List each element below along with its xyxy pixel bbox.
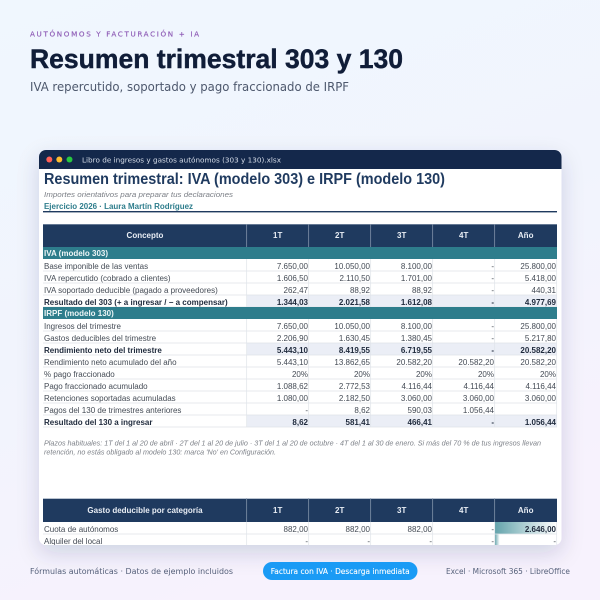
row: resultado 303: -	[491, 298, 494, 307]
row: pagos anteriores: 590,03	[408, 406, 433, 415]
row: rendimiento neto	[44, 347, 556, 354]
row: IVA soportado	[44, 287, 556, 294]
row: ingresos: 7.650,00	[277, 322, 309, 331]
row: base imponible: -	[491, 262, 494, 271]
row: pago acumulado: 2.772,53	[339, 382, 371, 391]
row: rendimiento acumulado: 20.582,20	[458, 358, 495, 367]
row: alquiler: -	[429, 537, 432, 546]
row: IVA repercutido: 2.110,50	[339, 274, 371, 283]
note: Plazos habituales: 1T del 1 al 20 de abril · 2T del 1 al 20 de julio · 3T del 1 al 20 de octubre · 4T del 1 al 30 de enero. Si más del 70 % de tus ingresos llevan	[44, 438, 541, 448]
section: IRPF: IRPF (modelo 130)	[44, 309, 114, 318]
row: base imponible	[44, 263, 556, 270]
row: IVA soportado: IVA soportado deducible (pagado a proveedores)	[44, 286, 218, 295]
row: ingresos: 10.050,00	[334, 322, 371, 331]
table header: Año	[518, 506, 534, 515]
row: pagos anteriores	[44, 407, 494, 414]
row: cuota: 882,00	[346, 525, 371, 534]
table header: 1T	[273, 231, 282, 240]
note	[44, 440, 541, 456]
row: resultado 130: 8,62	[292, 418, 309, 427]
row: gastos	[44, 335, 556, 342]
row: pago acumulado: 1.088,62	[277, 382, 309, 391]
row: ingresos: Ingresos del trimestre	[44, 322, 121, 331]
footer right text: Excel · Microsoft 365 · LibreOffice	[446, 567, 570, 576]
window title bar	[39, 150, 562, 169]
row: base imponible: 8.100,00	[401, 262, 433, 271]
row: porcentaje: 20%	[292, 370, 308, 379]
row: base imponible: 10.050,00	[334, 262, 371, 271]
footer left text: Fórmulas automáticas · Datos de ejemplo incluidos	[30, 567, 233, 576]
window title bar: Libro de ingresos y gastos autónomos (303 y 130).xlsx	[82, 155, 282, 164]
row: ingresos: 25.800,00	[520, 322, 557, 331]
row: ingresos: 8.100,00	[401, 322, 433, 331]
row: pago acumulado: Pago fraccionado acumulado	[44, 382, 148, 391]
note: retención, no estás obligado al modelo 130: marca 'No' en Configuración.	[44, 448, 276, 456]
sheet heading: Resumen trimestral: IVA (modelo 303) e IRPF (modelo 130)	[44, 171, 445, 188]
row: gastos: 5.217,80	[525, 334, 557, 343]
row: pagos anteriores: 1.056,44	[463, 406, 495, 415]
row: pagos anteriores: Pagos del 130 de trimestres anteriores	[44, 406, 181, 415]
row: cuota	[44, 526, 556, 534]
row: alquiler: -	[491, 537, 494, 546]
table header: 1T	[273, 506, 282, 515]
row: pago acumulado	[44, 383, 556, 390]
section: IVA: IVA (modelo 303)	[44, 249, 108, 258]
row: ingresos	[44, 323, 556, 330]
row: resultado 303: 1.344,03	[277, 298, 309, 307]
row: porcentaje: 20%	[478, 370, 494, 379]
shaded total cells	[247, 295, 557, 307]
row: IVA soportado: 88,92	[350, 286, 371, 295]
row: resultado 303: 1.612,08	[401, 298, 433, 307]
row: alquiler: -	[367, 537, 370, 546]
row: resultado 303: 2.021,58	[339, 298, 371, 307]
sheet heading: Ejercicio 2026 · Laura Martín Rodríguez	[44, 202, 193, 211]
row: alquiler: -	[305, 537, 308, 546]
header	[30, 30, 403, 94]
row: cuota: Cuota de autónomos	[44, 525, 118, 534]
table header: Gasto deducible por categoría	[87, 506, 203, 515]
row: rendimiento neto: 8.419,55	[339, 346, 371, 355]
panel: spreadsheet window	[39, 150, 562, 546]
row: cuota: 882,00	[284, 525, 309, 534]
row: rendimiento acumulado: Rendimiento neto acumulado del año	[44, 358, 177, 367]
row: IVA soportado: 88,92	[412, 286, 433, 295]
table header: Concepto	[127, 231, 164, 240]
row: pagos anteriores: 8,62	[354, 406, 371, 415]
row: cuota: 2.646,00	[525, 525, 557, 534]
row: gastos: -	[491, 334, 494, 343]
row: pago acumulado: 4.116,44	[401, 382, 433, 391]
sheet heading	[43, 171, 557, 212]
row: gastos: 2.206,90	[277, 334, 309, 343]
row: pagos anteriores: -	[305, 406, 308, 415]
table header: 3T	[397, 506, 406, 515]
row: IVA repercutido	[44, 275, 556, 282]
row: porcentaje: 20%	[416, 370, 432, 379]
row: base imponible: 7.650,00	[277, 262, 309, 271]
row: porcentaje: 20%	[540, 370, 556, 379]
row: base imponible: 25.800,00	[520, 262, 557, 271]
row: base imponible: Base imponible de las ventas	[44, 262, 148, 271]
row: rendimiento acumulado	[44, 359, 556, 366]
row: cuota: 882,00	[408, 525, 433, 534]
row: porcentaje	[44, 371, 556, 378]
row: rendimiento neto: 6.719,55	[401, 346, 433, 355]
row: IVA repercutido: 1.701,00	[401, 274, 433, 283]
row: rendimiento neto: -	[491, 346, 494, 355]
row: gastos: Gastos deducibles del trimestre	[44, 334, 157, 343]
row: resultado 130: 1.056,44	[525, 418, 557, 427]
row: retenciones	[44, 395, 556, 402]
row: pago acumulado: 4.116,44	[525, 382, 557, 391]
row: IVA repercutido: IVA repercutido (cobrado a clientes)	[44, 274, 171, 283]
row: IVA repercutido: 1.606,50	[277, 274, 309, 283]
row: resultado 130: 581,41	[346, 418, 371, 427]
data bars	[495, 522, 557, 534]
section: IVA	[43, 247, 557, 259]
grid	[43, 259, 557, 427]
row: cuota: -	[491, 525, 494, 534]
row: IVA soportado: -	[491, 286, 494, 295]
sheet heading: Importes orientativos para preparar tus declaraciones	[44, 190, 233, 199]
row: IVA repercutido: -	[491, 274, 494, 283]
row: rendimiento acumulado: 13.862,65	[334, 358, 371, 367]
row: rendimiento acumulado: 5.443,10	[277, 358, 309, 367]
row: porcentaje: 20%	[354, 370, 370, 379]
row: resultado 130: Resultado del 130 a ingresar	[44, 418, 152, 427]
row: alquiler	[44, 538, 556, 545]
table header: 4T	[459, 506, 468, 515]
table header: 4T	[459, 231, 468, 240]
row: retenciones: 1.080,00	[277, 394, 309, 403]
table header: 3T	[397, 231, 406, 240]
row: IVA repercutido: 5.418,00	[525, 274, 557, 283]
row: retenciones: 3.060,00	[525, 394, 557, 403]
row: pago acumulado: 4.116,44	[463, 382, 495, 391]
table header: 2T	[335, 231, 344, 240]
row: ingresos: -	[491, 322, 494, 331]
table: gasto deducible por categoría	[43, 498, 557, 546]
section: IRPF	[43, 307, 557, 319]
footer	[30, 562, 570, 580]
row: rendimiento neto: 20.582,20	[520, 346, 557, 355]
badge: Factura con IVA · Descarga inmediata	[271, 567, 410, 576]
row: alquiler: -	[553, 537, 556, 546]
row: resultado 303: Resultado del 303 (+ a ingresar / − a compensar)	[44, 298, 228, 307]
row: rendimiento acumulado: 20.582,20	[520, 358, 557, 367]
table header	[43, 498, 557, 522]
table header	[43, 224, 557, 247]
table header: Año	[518, 231, 534, 240]
row: gastos: 1.630,45	[339, 334, 371, 343]
row: rendimiento acumulado: 20.582,20	[396, 358, 433, 367]
subtitle: IVA repercutido, soportado y pago fraccionado de IRPF	[30, 80, 349, 94]
row: rendimiento neto: 5.443,10	[277, 346, 309, 355]
eyebrow: AUTÓNOMOS Y FACTURACIÓN + IA	[30, 30, 199, 38]
badge	[263, 562, 418, 580]
row: rendimiento neto: Rendimiento neto del trimestre	[44, 346, 162, 355]
row: alquiler: Alquiler del local	[44, 537, 102, 546]
row: resultado 130: 466,41	[408, 418, 433, 427]
title: Resumen trimestral 303 y 130	[30, 44, 403, 74]
row: IVA soportado: 440,31	[532, 286, 557, 295]
row: resultado 303: 4.977,69	[525, 298, 557, 307]
row: retenciones: 3.060,00	[401, 394, 433, 403]
row: resultado 130	[44, 419, 556, 426]
row: retenciones: 3.060,00	[463, 394, 495, 403]
table header: 2T	[335, 506, 344, 515]
row: retenciones: Retenciones soportadas acumuladas	[44, 394, 176, 403]
row: resultado 130: -	[491, 418, 494, 427]
row: IVA soportado: 262,47	[284, 286, 309, 295]
row: resultado 303	[44, 299, 556, 306]
row: retenciones: 2.182,50	[339, 394, 371, 403]
row: porcentaje: % pago fraccionado	[44, 370, 115, 379]
row: gastos: 1.380,45	[401, 334, 433, 343]
table: IVA e IRPF	[43, 224, 557, 427]
